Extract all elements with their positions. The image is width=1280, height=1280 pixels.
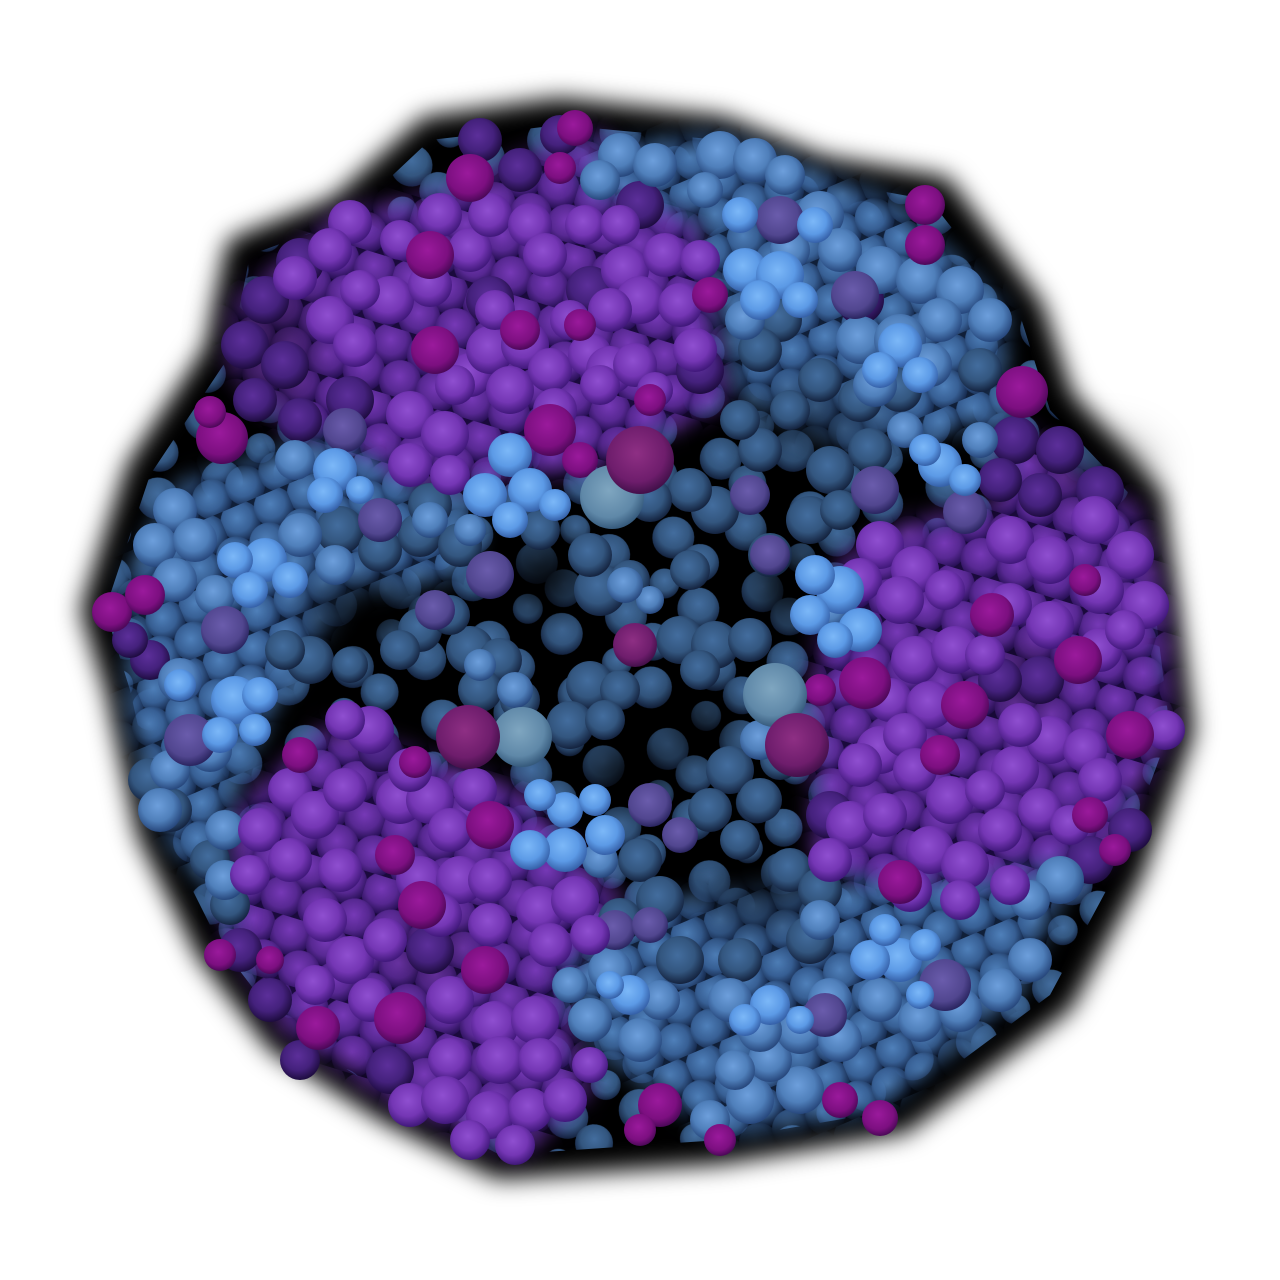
atoms: central maroon spheres bbox=[436, 426, 829, 777]
cluster: outer dark purple atoms bbox=[112, 115, 1152, 1094]
dark background atom layer bbox=[105, 125, 1170, 1155]
cluster: medium blue atoms bbox=[133, 131, 1084, 1140]
atoms: central grey-blue spheres bbox=[492, 465, 807, 767]
cluster: dark blue core atoms bbox=[128, 298, 1002, 984]
dense atom fields by region bbox=[112, 118, 1185, 1167]
cluster: violet-blue mid atoms bbox=[164, 196, 987, 1037]
molecular model illustration bbox=[62, 78, 1213, 1198]
black soft shadow halo bbox=[95, 112, 1180, 1165]
cluster: bright purple atoms bbox=[230, 193, 1185, 1165]
cluster: magenta atoms bbox=[92, 110, 1154, 1156]
shaded hollows bbox=[230, 260, 1150, 974]
cluster: bright blue highlighted atoms bbox=[164, 197, 981, 1036]
